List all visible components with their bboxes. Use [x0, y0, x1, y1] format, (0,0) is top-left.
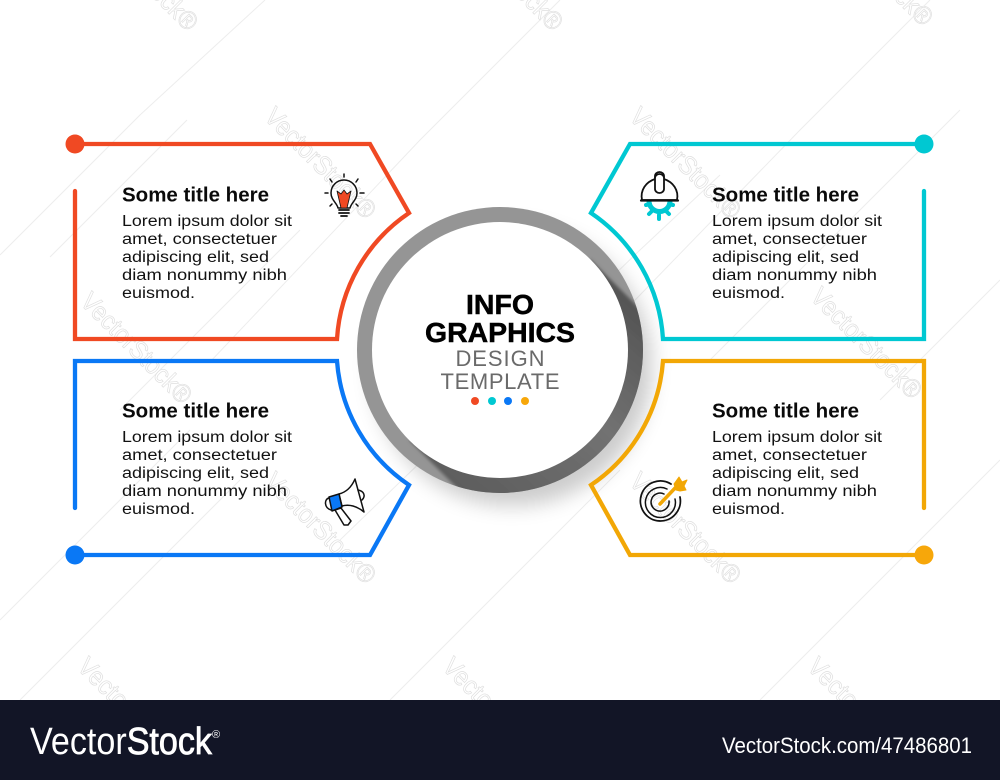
heading: Some title here	[122, 400, 269, 422]
ring cast shadow	[409, 258, 643, 493]
blue outline	[75, 361, 409, 555]
icon: helmet and gear	[641, 172, 678, 219]
blue dot	[66, 546, 84, 564]
footer logo: VectorStock	[30, 721, 213, 763]
body text: adipiscing elit, sed	[122, 465, 269, 482]
watermark background pattern: VectorStock®	[437, 651, 561, 775]
teal outline	[591, 144, 924, 339]
watermark background pattern: VectorStock®	[441, 286, 565, 410]
subtitle line: DESIGN: DESIGN	[456, 346, 544, 371]
body text: adipiscing elit, sed	[712, 465, 859, 482]
body text: amet, consectetuer	[122, 447, 277, 464]
body text: Lorem ipsum dolor sit	[122, 213, 293, 230]
body text: adipiscing elit, sed	[712, 249, 859, 266]
watermark background pattern: VectorStock®	[72, 651, 196, 775]
body text: Lorem ipsum dolor sit	[712, 213, 883, 230]
orange outline	[591, 361, 924, 555]
watermark background pattern: VectorStock®	[259, 101, 383, 225]
red outline	[75, 144, 409, 339]
watermark background pattern: VectorStock®	[624, 101, 748, 225]
central circle	[357, 207, 661, 515]
soft drop shadow	[372, 226, 652, 506]
red dot	[66, 134, 84, 154]
icon: target with arrow	[640, 477, 687, 521]
body text: euismod.	[712, 501, 785, 518]
footer image id: VectorStock.com/47486801	[722, 733, 972, 758]
panel: bottom right orange	[591, 361, 934, 564]
icon: megaphone	[325, 479, 364, 525]
outer gray ring	[357, 207, 643, 493]
center title	[425, 289, 575, 394]
icon: light bulb	[325, 174, 364, 216]
body text: Lorem ipsum dolor sit	[712, 429, 883, 446]
panel: top left red	[66, 134, 409, 339]
footer bar	[0, 700, 1000, 780]
subtitle line: TEMPLATE: TEMPLATE	[440, 369, 560, 394]
teal dot	[914, 134, 934, 154]
body text	[712, 429, 883, 518]
heading: Some title here	[122, 184, 269, 206]
registered mark: ®	[212, 729, 220, 741]
title line: GRAPHICS: GRAPHICS	[425, 317, 575, 348]
panel: top right teal	[591, 134, 934, 339]
heading: Some title here	[712, 184, 859, 206]
white inner disc	[372, 222, 628, 478]
body text: adipiscing elit, sed	[122, 249, 269, 266]
body text: diam nonummy nibh	[712, 483, 877, 500]
colour dots	[471, 397, 529, 405]
body text: euismod.	[122, 501, 195, 518]
body text	[712, 213, 883, 302]
body text: amet, consectetuer	[122, 231, 277, 248]
body text: euismod.	[122, 285, 195, 302]
title line: INFO: INFO	[466, 289, 534, 320]
body text: diam nonummy nibh	[712, 267, 877, 284]
watermark background pattern: VectorStock®	[802, 651, 926, 775]
body text	[122, 213, 293, 302]
orange dot	[914, 546, 934, 564]
body text: Lorem ipsum dolor sit	[122, 429, 293, 446]
watermark background pattern: VectorStock®	[624, 466, 748, 590]
body text: diam nonummy nibh	[122, 267, 287, 284]
body text: amet, consectetuer	[712, 231, 867, 248]
watermark background pattern: VectorStock®	[259, 466, 383, 590]
panel: bottom left blue	[66, 361, 409, 564]
body text: diam nonummy nibh	[122, 483, 287, 500]
watermark background pattern: VectorStock®	[75, 286, 199, 410]
heading: Some title here	[712, 400, 859, 422]
body text: amet, consectetuer	[712, 447, 867, 464]
body text	[122, 429, 293, 518]
body text: euismod.	[712, 285, 785, 302]
watermark background pattern: VectorStock®	[805, 281, 929, 405]
